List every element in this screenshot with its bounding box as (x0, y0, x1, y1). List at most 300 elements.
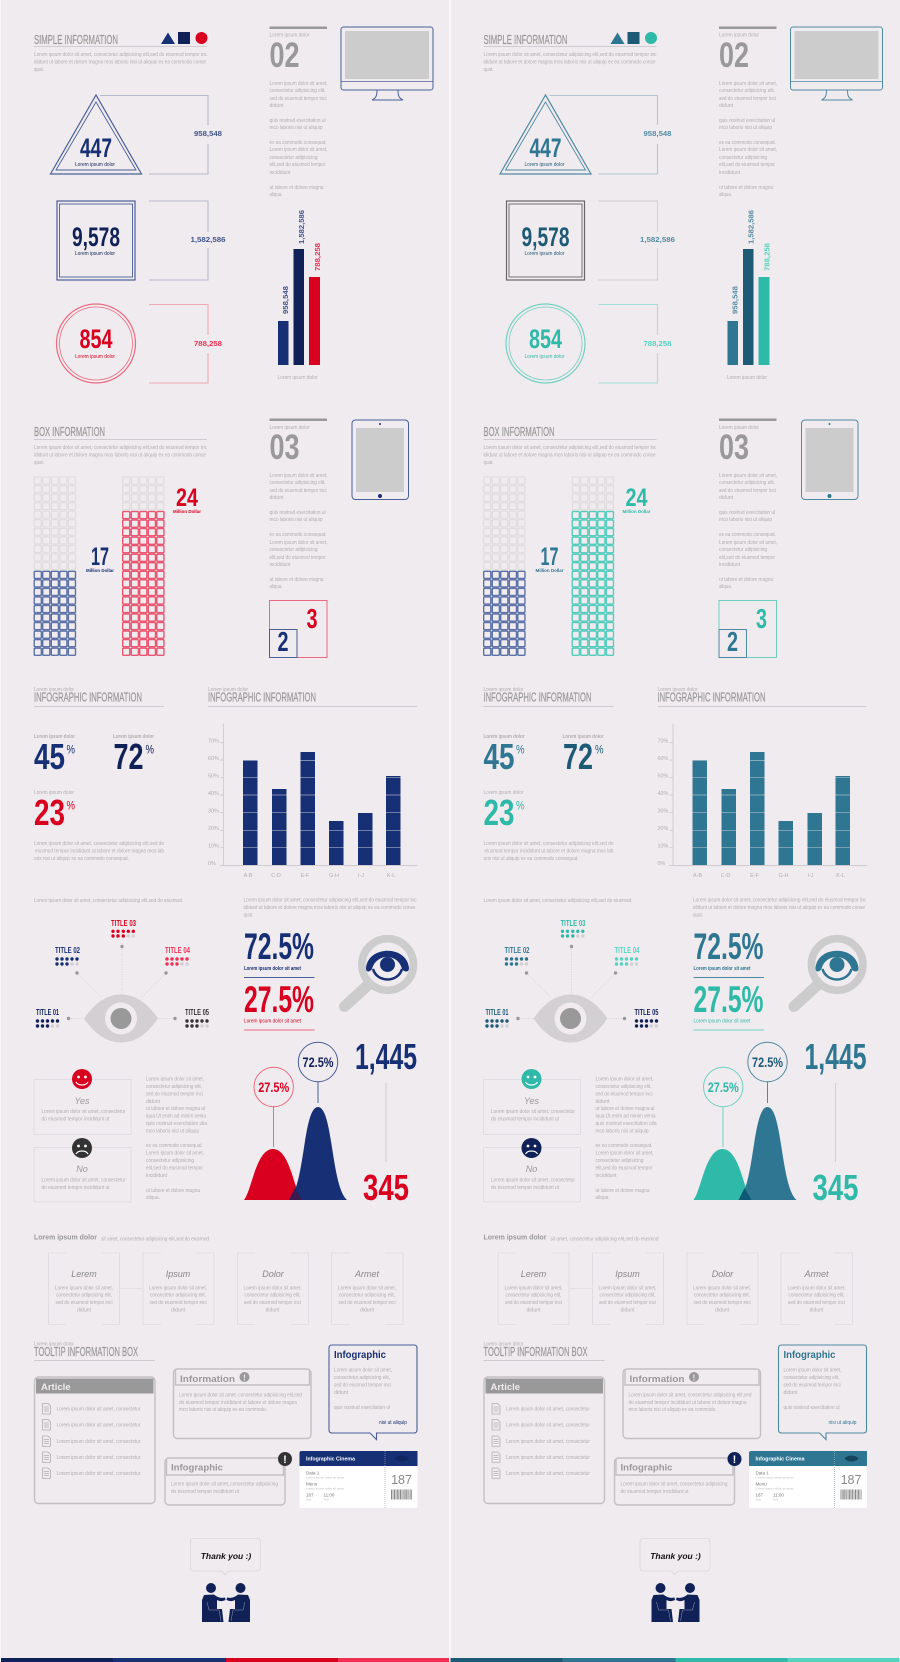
card: Armet (332, 1253, 403, 1324)
icon: magnifier with eye (344, 939, 414, 1006)
card: Lerem: sed do eiusmod tempor inci (505, 1300, 562, 1306)
heading: infographic information left: INFOGRAPHIC INFORMATION (484, 690, 592, 704)
triangle stat 447: 447 (80, 133, 112, 163)
stats text: eiusmod tempor incididunt ut labore et dolore magna mos lab (35, 848, 164, 854)
stat 72.5% (244, 926, 314, 978)
card: Dolor: didunt (266, 1308, 280, 1314)
icon: tablet (802, 420, 858, 500)
bar chart: three bars: 958,548 (730, 286, 740, 314)
stat 72.5%: Lorem ipsum dolor sit amet (244, 966, 301, 972)
right intro text: Lorem ipsum dolor sit amet, consectetur adipisicing elit,sed do eiusmod tempor inc (244, 898, 417, 904)
tooltip: speech bubble: sed do eiusmod tempor inci (784, 1382, 840, 1388)
icon: tablet (352, 420, 408, 500)
right intro text: quat. (244, 912, 254, 918)
section lead: sit amet, consectetur adipisicing elit,sed do eiusmod (101, 1236, 209, 1242)
section lead: Lorem ipsum dolor (484, 1232, 547, 1242)
title 01: TITLE 01 (486, 1008, 509, 1017)
tooltip: speech bubble: sed do eiusmod tempor inci (334, 1382, 391, 1388)
value 1,445: 1,445 (355, 1036, 417, 1077)
card: Ipsum (592, 1253, 664, 1324)
column 02 text: sed do eiusmod tempor inci (719, 96, 776, 102)
heading: tooltip information box (34, 1342, 155, 1360)
column 03 text: ut labore et dolore magna (270, 577, 324, 583)
tooltip: infographic alert: Lorem ipsum dolor sit amet, consectetur adipisicing (171, 1482, 278, 1488)
title 03: TITLE 03 (560, 919, 586, 928)
card: Armet: Lorem ipsum dolor sit amet, (338, 1286, 396, 1292)
bar chart: percentages: 30% (658, 808, 668, 814)
title 03 (560, 919, 586, 938)
right intro text: ididunt ut labore et dolore magna mos laboris nisi ut aliquip ex ea commodo conse (244, 905, 416, 911)
triangle stat 447 (50, 95, 142, 174)
right intro text: quat. (693, 912, 703, 918)
column 02 heading (270, 26, 327, 75)
column 03 heading: Lorem ipsum dolor (270, 425, 310, 431)
bar chart: three bars: 958,548 (281, 286, 290, 314)
heading: infographic information right: INFOGRAPHIC INFORMATION (658, 690, 766, 704)
column 03 text: elit,sed do eiusmod tempor (719, 555, 775, 561)
column 03 text (719, 473, 777, 590)
column 03 heading: 03 (270, 428, 300, 467)
ticket: Lorem ipsum dolor sit amet (306, 1488, 344, 1490)
bar chart: three bars: 788,258 (313, 243, 322, 271)
no card (484, 1138, 580, 1202)
tooltip: information: mco laboris nisi ut aliquip ex ea commodo. (179, 1407, 267, 1413)
icon: square (628, 32, 640, 44)
box intro text: Lorem ipsum dolor sit amet, consectetur adipisicing elit,sed do eiusmod tempor inc (34, 445, 207, 451)
title 02: TITLE 02 (55, 946, 80, 955)
card: Armet: Armet (803, 1269, 829, 1279)
bar chart: three bars (727, 210, 772, 381)
icon: circle (645, 32, 657, 44)
middle text column: consectetur adipisicing (146, 1158, 194, 1164)
intro text: ididunt ut labore et dolore magna mos laboris nisi ut aliquip ex ea commodo conse (484, 60, 656, 66)
column 03 text: consectetur adipisicing elit, (719, 480, 775, 486)
tooltip: speech bubble: didunt (784, 1390, 798, 1396)
card: Ipsum: didunt (620, 1308, 635, 1314)
column 03 text (270, 473, 328, 590)
column 03 text: aliqua. (270, 584, 282, 590)
stat 27.5%: 27.5% (694, 979, 764, 1020)
heading: infographic information left (484, 687, 614, 706)
panel: navy and red version (1, 26, 449, 1662)
column 02 text: quis nostrud exercitation ul (270, 118, 326, 124)
tooltip: information: do eiusmod tempor incididunt ut labore et dolore magna (628, 1400, 746, 1406)
thank you bubble (190, 1538, 260, 1574)
column 03 text: Lorem ipsum dolor sit amet, (719, 540, 777, 546)
column 03 text: sed do eiusmod tempor inci (270, 488, 326, 494)
column 03 text: quis nostrud exercitation ul (719, 510, 775, 516)
stat 72.5%: 72.5% (244, 926, 314, 967)
heading: infographic information left: INFOGRAPHIC INFORMATION (34, 690, 142, 704)
bar chart: percentages: 70% (208, 738, 219, 744)
stat 23%: Lorem ipsum dolor (484, 790, 524, 796)
stat 23%: % (516, 798, 525, 812)
tooltip: speech bubble: Infographic (784, 1350, 836, 1361)
card: Dolor: consectetur adipisicing elit, (694, 1292, 750, 1298)
tooltip: infographic alert: Infographic (171, 1462, 223, 1474)
icon: triangle (161, 32, 175, 44)
intro text (484, 52, 657, 73)
pictogram grid 24 (122, 476, 165, 656)
heading: infographic information right: Lorem ipsum dolor (208, 687, 248, 693)
box intro text: ididunt ut labore et dolore magna mos laboris nisi ut aliquip ex ea commodo conse (484, 452, 656, 458)
tooltip: information (174, 1369, 311, 1438)
bar chart: percentages: A-B (244, 873, 253, 879)
nested squares 2 and 3 (270, 600, 327, 658)
card: Dolor: Dolor (712, 1269, 734, 1279)
value 1,445: 1,445 (804, 1036, 866, 1077)
tooltip: article: Lorem ipsum dolor sit amet, consectetur (56, 1455, 141, 1461)
column 02 text: didunt (270, 103, 284, 109)
stat 72.5% (694, 926, 764, 978)
card: Lerem: consectetur adipisicing elit, (506, 1292, 562, 1298)
column 03 text: ex ea commodo consequat. (719, 532, 776, 538)
heading: tooltip information box (484, 1342, 604, 1360)
bracket 958,548 (550, 96, 672, 174)
value 24: 24 (176, 484, 198, 512)
card: Armet: Armet (354, 1269, 379, 1279)
ticket: Data 1 (756, 1470, 769, 1476)
bar chart: percentages: 20% (208, 826, 219, 832)
bar chart: percentages (208, 724, 418, 879)
value 24: Million Dollar (173, 509, 201, 514)
icon: monitor (790, 27, 882, 100)
bracket 1,582,586: 1,582,586 (640, 235, 675, 244)
icon: two people talking (652, 1583, 700, 1622)
card: Lerem: Lerem (71, 1269, 97, 1279)
icon: monitor (341, 27, 433, 100)
column 02 heading (719, 26, 776, 75)
bar chart: three bars: Lorem ipsum dolor (727, 375, 767, 381)
card: Ipsum: Ipsum (615, 1269, 640, 1279)
middle text column: ut labore et dolore magna al (596, 1106, 654, 1112)
no card (34, 1138, 131, 1202)
middle text column: Lorem ipsum dolor sit amet, (596, 1076, 654, 1082)
column 03 text: mco laboris nisi ut aliquip (719, 517, 772, 523)
heading: box information: BOX INFORMATION (484, 425, 554, 439)
column 03 text: elit,sed do eiusmod tempor (270, 555, 326, 561)
tooltip: speech bubble: Infographic (334, 1350, 386, 1361)
card: Armet: didunt (810, 1308, 824, 1314)
middle text column: iqua.Ut enim ad minim venia (146, 1114, 206, 1120)
pictogram grid 24 (572, 476, 614, 656)
bar chart: three bars: Lorem ipsum dolor (278, 375, 318, 381)
middle text column: didunt (146, 1099, 160, 1105)
ticket: Lorem ipsum dolor sit amet (756, 1476, 794, 1480)
middle text column: consectetur adipisicing elit, (146, 1084, 202, 1090)
card: Dolor: consectetur adipisicing elit, (244, 1292, 301, 1298)
column 02 heading: Lorem ipsum dolor (270, 32, 310, 38)
ticket: Infographic Cinema (306, 1456, 355, 1462)
bar chart: percentages: E-F (750, 873, 760, 879)
bracket 1,582,586 (598, 201, 675, 280)
box intro text: quat. (34, 460, 44, 466)
section lead (34, 1232, 209, 1242)
tooltip: information: Lorem ipsum dolor sit amet, consectetur adipisicing elit,sed (179, 1392, 302, 1398)
stats text: Lorem ipsum dolor sit amet, consectetur adipisicing elit,sed do (484, 841, 614, 847)
bracket 788,258 (598, 304, 672, 383)
heading: tooltip information box: TOOLTIP INFORMATION BOX (484, 1345, 588, 1359)
tooltip: speech bubble: Lorem ipsum dolor sit amet, (334, 1368, 392, 1374)
card: Dolor: sed do eiusmod tempor inci (694, 1300, 750, 1306)
value 17: Million Dollar (536, 568, 564, 573)
tooltip: article: Lorem ipsum dolor sit amet, consectetur (56, 1422, 141, 1428)
nested squares 2 and 3: 3 (306, 603, 318, 634)
bar chart: percentages (658, 724, 867, 879)
middle text column: ut labore et dolore magna al (146, 1106, 205, 1112)
bar chart: percentages: 40% (658, 791, 668, 797)
tooltip: infographic alert: ! (283, 1454, 287, 1466)
middle text column: quis nostrud exercitation ulla (596, 1121, 656, 1127)
column 02 text: consectetur adipisicing (270, 155, 318, 161)
circle stat 854: Lorem ipsum dolor (75, 354, 115, 360)
icon: triangle (610, 32, 624, 44)
eye diagram (67, 945, 177, 1042)
box intro text: quat. (484, 460, 494, 466)
column 03 text: didunt (270, 495, 284, 501)
ticket: Lorem ipsum dolor sit amet (306, 1476, 344, 1480)
box intro text: ididunt ut labore et dolore magna mos laboris nisi ut aliquip ex ea commodo conse (34, 452, 206, 458)
bracket 1,582,586 (149, 201, 226, 280)
tooltip: article: Article (490, 1382, 520, 1393)
stat 45%: % (66, 742, 75, 756)
ticket: Data 1 (306, 1470, 320, 1476)
card: Ipsum: Lorem ipsum dolor sit amet, (598, 1286, 657, 1292)
card: Lerem: Lerem (521, 1269, 547, 1279)
card: Lerem: sed do eiusmod tempor inci (56, 1300, 112, 1306)
tooltip: information: ! (243, 1374, 246, 1382)
bar chart: three bars (278, 210, 322, 381)
triangle stat 447: 447 (530, 133, 562, 163)
heading: tooltip information box: TOOLTIP INFORMATION BOX (34, 1345, 138, 1359)
title 04: TITLE 04 (614, 946, 640, 955)
tooltip: information: do eiusmod tempor incididunt ut labore et dolore magna (179, 1400, 297, 1406)
column 02 text: ut labore et dolore magna (719, 185, 773, 191)
column 02 text: Lorem ipsum dolor sit amet, (270, 147, 328, 153)
pictogram grid 17 (34, 476, 76, 656)
tooltip: speech bubble: nisi ut aliquip (828, 1420, 856, 1426)
card: Dolor: didunt (715, 1308, 729, 1314)
ticket: 11:00 (773, 1492, 784, 1498)
ticket: Menu (756, 1482, 767, 1486)
eye section text: Lorem ipsum dolor sit amet, consectetur adipisicing elit,sed do eiusmod. (34, 898, 183, 904)
right intro text: Lorem ipsum dolor sit amet, consectetur adipisicing elit,sed do eiusmod tempor inc (693, 898, 866, 904)
bar chart: percentages: A-B (693, 873, 702, 879)
heading: tooltip information box: Lorem ipsum dolor (34, 1342, 74, 1348)
middle text column: consectetur adipisicing elit, (596, 1084, 652, 1090)
column 02 text: elit,sed do eiusmod tempor (719, 162, 775, 168)
column 03 heading (270, 418, 327, 467)
value 17: 17 (540, 543, 558, 571)
column 02 text: ut labore et dolore magna (270, 185, 324, 191)
card: Dolor: Dolor (262, 1269, 285, 1279)
value 17: Million Dollar (86, 568, 114, 573)
column 03 heading: 03 (719, 428, 749, 467)
stats text: Lorem ipsum dolor sit amet, consectetur adipisicing elit,sed do (34, 841, 164, 847)
circle stat 854: 854 (80, 324, 112, 354)
stat 72%: 72 (563, 736, 593, 777)
stat 27.5% (694, 979, 764, 1030)
tooltip: infographic alert (165, 1452, 292, 1505)
middle text column (146, 1076, 207, 1201)
title 03 (111, 919, 136, 938)
column 02 text: Lorem ipsum dolor sit amet, (270, 81, 328, 87)
tooltip: speech bubble: Lorem ipsum dolor sit amet, (784, 1368, 842, 1374)
column 02 text: aliqua. (719, 192, 732, 198)
yes card (34, 1069, 131, 1134)
stat 45%: % (516, 742, 525, 756)
title 05: TITLE 05 (634, 1008, 659, 1017)
column 03 text: consectetur adipisicing elit, (270, 480, 326, 486)
column 02 text: incididunt (270, 170, 291, 176)
bar chart: three bars: 1,582,586 (297, 210, 306, 244)
heading: box information: BOX INFORMATION (34, 425, 105, 439)
stat 72%: Lorem ipsum dolor (562, 734, 604, 740)
tooltip: speech bubble (329, 1345, 417, 1440)
box intro text (484, 445, 657, 466)
column 02 text (270, 81, 328, 198)
value 17: 17 (91, 543, 109, 571)
card: Ipsum: consectetur adipisicing elit, (600, 1292, 656, 1298)
heading: infographic information right (658, 687, 866, 706)
card: Armet (781, 1253, 852, 1324)
column 03 text: Lorem ipsum dolor sit amet, (270, 473, 328, 479)
column 02 text: aliqua. (270, 192, 282, 198)
column 02 text: elit,sed do eiusmod tempor (270, 162, 326, 168)
circle stat 854 (506, 304, 585, 383)
bar chart: percentages: K-L (836, 873, 845, 879)
no card: do eiusmod tempor incididunt ut (491, 1185, 559, 1191)
column 03 text: Lorem ipsum dolor sit amet, (270, 540, 328, 546)
square stat 9,578 (57, 201, 135, 280)
no card: No (526, 1164, 537, 1174)
middle text column: consectetur adipisicing (596, 1158, 644, 1164)
icon: square (178, 32, 190, 44)
right intro text (693, 898, 866, 918)
nested squares 2 and 3: 2 (278, 626, 288, 657)
heading: infographic information left (34, 687, 164, 706)
triangle stat 447 (500, 95, 591, 174)
card: Ipsum: sed do eiusmod tempor inci (599, 1300, 656, 1306)
ticket: Lorem ipsum dolor sit amet (756, 1488, 794, 1490)
ticket: 187 (756, 1492, 764, 1498)
title 04 (614, 946, 640, 966)
column 03 text: ex ea commodo consequat. (270, 532, 326, 538)
middle text column: ex ea commodo consequat. (146, 1143, 203, 1149)
column 03 text: aliqua. (719, 584, 732, 590)
card: Armet: consectetur adipisicing elit, (339, 1292, 395, 1298)
tooltip: information: Information (630, 1374, 685, 1385)
card: Lerem: didunt (77, 1308, 91, 1314)
column 03 text: consectetur adipisicing (270, 547, 318, 553)
heading: simple information: SIMPLE INFORMATION (484, 33, 568, 47)
ticket (749, 1451, 867, 1508)
footer colour bar (450, 1658, 900, 1662)
tooltip: information: mco laboris nisi ut aliquip ex ea commodo. (628, 1407, 716, 1413)
middle text column: ex ea commodo consequat. (596, 1143, 652, 1149)
box intro text (34, 445, 207, 466)
middle text column: aliqua. (146, 1195, 160, 1201)
stats text: oris nisi ut aliquip ex ea commodo consequat. (34, 856, 129, 862)
column 02 text: incididunt (719, 170, 740, 176)
bar chart: percentages: 0% (658, 861, 665, 867)
tooltip: article: Lorem ipsum dolor sit amet, consectetur (56, 1439, 141, 1445)
value 17 (536, 543, 564, 573)
yes card: Lorem ipsum dolor sit amet, consectetur (42, 1109, 126, 1115)
heading: infographic information right: Lorem ipsum dolor (658, 687, 698, 693)
title 01 (36, 1008, 59, 1028)
title 01 (485, 1008, 509, 1028)
column 03 heading (719, 418, 776, 467)
column 02 text: quis nostrud exercitation ul (719, 118, 775, 124)
column 02 text: Lorem ipsum dolor sit amet, (719, 147, 777, 153)
ticket: Menu (306, 1482, 318, 1486)
stat 23%: 23 (34, 792, 65, 833)
column 02 text (719, 81, 777, 198)
middle text column: iqua.Ut enim ad minim venia (596, 1114, 656, 1120)
stat 27.5%: 27.5% (244, 979, 314, 1020)
tooltip: article: Lorem ipsum dolor sit amet, consectetur (506, 1455, 590, 1461)
middle text column: sed do eiusmod tempor inci (596, 1092, 652, 1098)
ticket: Time (773, 1498, 779, 1502)
bar chart: percentages: G-H (329, 873, 339, 879)
tooltip: article: Lorem ipsum dolor sit amet, consectetur (506, 1471, 590, 1477)
square stat 9,578: Lorem ipsum dolor (524, 251, 565, 257)
yes card: do eiusmod tempor incididunt ut (42, 1116, 110, 1122)
column 03 text: Lorem ipsum dolor sit amet, (719, 473, 777, 479)
yes card: do eiusmod tempor incididunt ut (491, 1116, 559, 1122)
ticket: Seat (306, 1498, 311, 1502)
stat 72%: 72 (114, 736, 144, 777)
stat 23%: Lorem ipsum dolor (34, 790, 74, 796)
bracket 958,548: 958,548 (644, 129, 672, 138)
tooltip: article: Lorem ipsum dolor sit amet, consectetur (56, 1406, 141, 1412)
tooltip: infographic alert (614, 1452, 742, 1505)
bar chart: percentages: C-D (721, 873, 730, 879)
intro text (34, 52, 207, 73)
no card: No (76, 1164, 88, 1174)
tooltip: speech bubble: nisi ut aliquip (379, 1420, 407, 1426)
tooltip: infographic alert: do eiusmod tempor incididunt ut (171, 1489, 239, 1495)
pictogram grid 17 (483, 476, 526, 656)
card: Ipsum: Lorem ipsum dolor sit amet, (149, 1286, 207, 1292)
circle stat 854: 854 (529, 324, 562, 354)
bar chart: percentages: 0% (208, 861, 216, 867)
card: Lerem (48, 1253, 143, 1324)
bell chart: 72.5% (752, 1054, 783, 1070)
title 05 (185, 1008, 209, 1028)
bar chart: three bars: 788,258 (762, 243, 772, 271)
intro text: Lorem ipsum dolor sit amet, consectetur adipisicing elit,sed do eiusmod tempor inc (34, 52, 207, 58)
bar chart: percentages: 60% (208, 756, 219, 762)
triangle stat 447: Lorem ipsum dolor (75, 162, 115, 168)
intro text: Lorem ipsum dolor sit amet, consectetur adipisicing elit,sed do eiusmod tempor inc (484, 52, 657, 58)
column 03 text: quis nostrud exercitation ul (270, 510, 326, 516)
stat 72.5%: 72.5% (694, 926, 764, 967)
ticket: Time (324, 1498, 330, 1502)
bar chart: percentages: I-J (358, 873, 364, 879)
column 02 text: didunt (719, 103, 733, 109)
no card: Lorem ipsum dolor sit amet, consectetur (491, 1178, 575, 1184)
bell chart (694, 1042, 796, 1200)
yes card: Yes (74, 1096, 90, 1106)
tooltip: article: Lorem ipsum dolor sit amet, consectetur (506, 1439, 590, 1445)
bar chart: percentages: E-F (301, 873, 310, 879)
nested squares 2 and 3 (719, 600, 776, 658)
heading: infographic information left: Lorem ipsum dolor (484, 687, 524, 693)
stat 27.5% (244, 979, 314, 1030)
square stat 9,578 (506, 201, 584, 280)
